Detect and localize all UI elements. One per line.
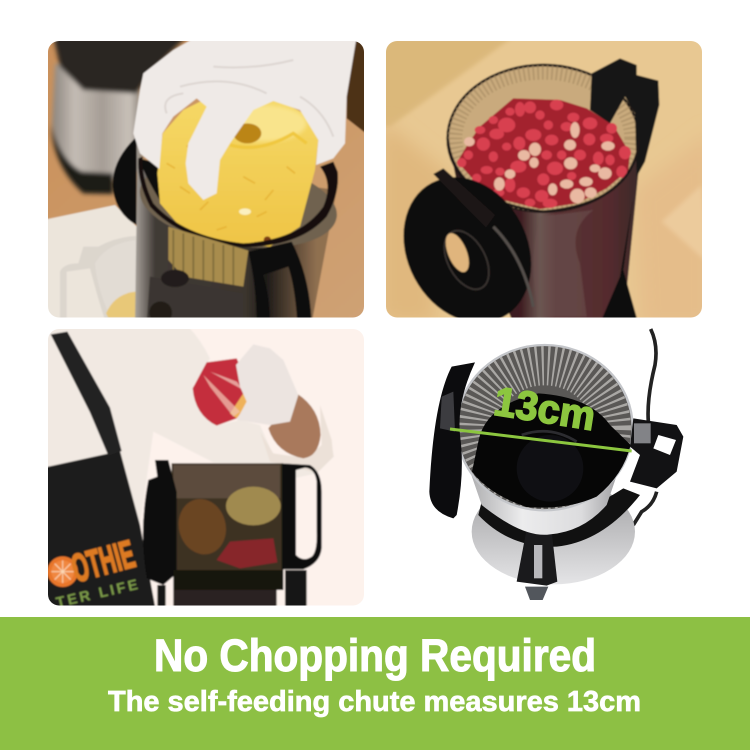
black motor base xyxy=(602,210,638,318)
grapefruit xyxy=(193,358,253,426)
jug rim xyxy=(138,157,338,247)
photo: pomegranate seeds filling the chute xyxy=(386,41,702,318)
juicer base xyxy=(156,568,308,606)
jug body xyxy=(135,163,337,323)
glove xyxy=(133,37,357,200)
spout xyxy=(517,515,557,600)
subheading: The self-feeding chute measures 13cm xyxy=(108,686,641,718)
apron logo text: TER LIFE xyxy=(55,577,140,612)
background juicer xyxy=(51,37,187,194)
apron logo text xyxy=(48,538,139,606)
pomegranate seed mass xyxy=(457,98,631,209)
green caption banner xyxy=(0,617,750,750)
headline: No Chopping Required xyxy=(154,630,596,681)
rear handle xyxy=(590,58,659,177)
chute cylinder xyxy=(463,432,632,535)
jug far inner wall xyxy=(139,176,338,250)
pale background xyxy=(138,329,364,606)
measurement line xyxy=(450,429,632,451)
towel xyxy=(43,205,137,323)
pineapple xyxy=(157,98,318,247)
power cord xyxy=(633,329,657,525)
pineapple seen through jug xyxy=(168,227,248,287)
apron logo text: OTHIE xyxy=(67,532,140,591)
wooden table background xyxy=(48,41,364,318)
jug interior xyxy=(448,65,639,212)
measurement label: 13cm xyxy=(491,378,599,439)
open lid xyxy=(429,362,475,518)
measuring cup xyxy=(60,236,136,320)
photo: person dropping grapefruit into the chute xyxy=(48,329,364,606)
front rim xyxy=(448,138,639,212)
jug body xyxy=(453,159,639,318)
black lid behind jug xyxy=(113,137,137,225)
black apron xyxy=(48,450,156,606)
jug handle xyxy=(248,242,312,323)
steel base xyxy=(472,479,635,584)
ribbed wall xyxy=(478,366,611,490)
white shirt xyxy=(48,329,313,522)
dark upper right wall xyxy=(346,42,364,133)
gloved hand xyxy=(236,344,298,425)
blurred kitchen background xyxy=(386,41,702,318)
apron strap xyxy=(51,332,122,456)
hinged lid xyxy=(402,168,534,318)
jug body xyxy=(172,463,283,570)
forearm xyxy=(268,393,321,458)
rolled shirt cuff xyxy=(264,408,332,471)
handle xyxy=(630,418,683,488)
jug handle xyxy=(282,463,322,569)
photo: top view of chute with 13cm measurement xyxy=(429,329,683,600)
hinged lid xyxy=(143,460,177,585)
photo: gloved hand pushing a whole pineapple into the chute xyxy=(48,41,364,318)
dark inner bowl xyxy=(472,393,631,508)
